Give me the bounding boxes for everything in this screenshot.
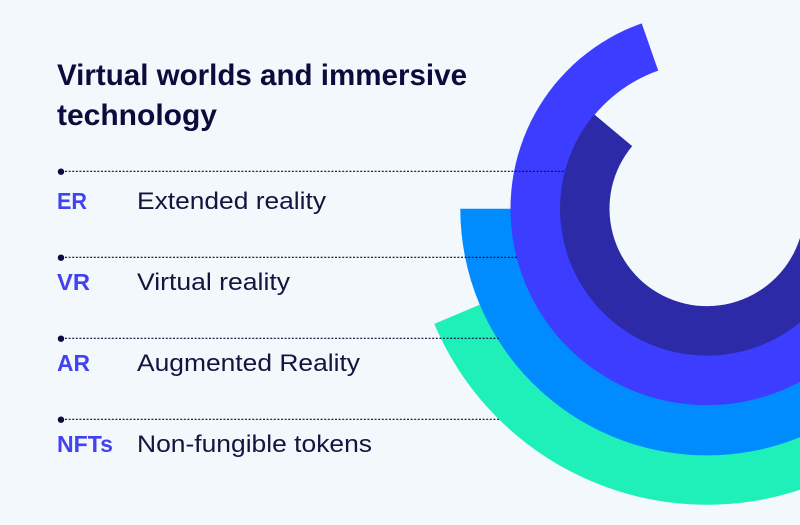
row: NFTs: Non-fungible tokens: [137, 431, 372, 458]
title: Virtual worlds and immersive: [57, 59, 467, 92]
row: AR: [57, 336, 499, 377]
row: VR: VR: [57, 269, 90, 295]
row: ER: ER: [57, 188, 87, 214]
arc: dark navy ring: [560, 114, 800, 356]
arc: indigo ring: [510, 23, 800, 405]
row: ER: Extended reality: [137, 188, 326, 215]
row: ER: [57, 168, 565, 215]
title: technology: [57, 99, 217, 132]
row: NFTs: [57, 416, 499, 458]
concentric arc chart: [434, 23, 800, 505]
arc: green outer ring: [434, 209, 800, 505]
row: VR: Virtual reality: [137, 269, 290, 296]
title: [57, 59, 467, 132]
row: AR: Augmented Reality: [137, 350, 360, 377]
row: AR: AR: [57, 350, 90, 376]
row: VR: [57, 255, 518, 296]
arc: blue ring: [460, 209, 800, 455]
row: NFTs: NFTs: [57, 431, 113, 457]
